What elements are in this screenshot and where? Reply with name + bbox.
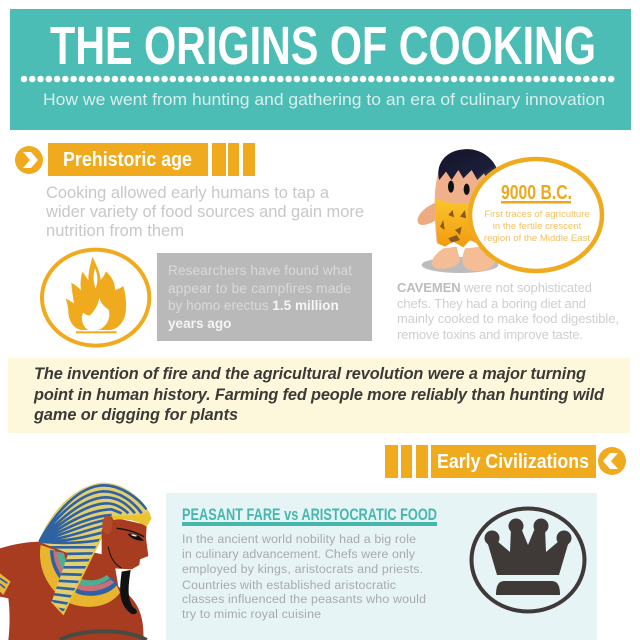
text: nobility: employed by kings, aristocrats and priests. <box>182 562 423 576</box>
text: nobility: in culinary advancement. Chefs were only <box>182 547 416 561</box>
body <box>0 542 143 640</box>
panel: header <box>10 9 631 130</box>
panel: turning point statement: point in human history. Farming fed people more reliably than hunting wild <box>33 386 605 404</box>
text: cavemen: CAVEMEN were not sophisticated <box>397 280 592 295</box>
subtitle: How we went from hunting and gathering to an era of culinary innovation <box>43 90 605 109</box>
text: nobility <box>182 532 426 621</box>
icon: fire <box>42 250 149 346</box>
panel: campfires callout: appear to be campfires made <box>168 281 351 296</box>
headdress <box>38 482 150 612</box>
text: nobility: try to mimic royal cuisine <box>182 607 321 621</box>
heading: Prehistoric age: Prehistoric age <box>63 149 192 171</box>
collar <box>40 545 120 607</box>
panel: campfires callout: by homo erectus 1.5 million <box>168 298 339 313</box>
illustration: pharaoh <box>0 480 153 640</box>
panel: campfires callout: years ago <box>168 316 231 331</box>
panel: campfires callout: Researchers have found what <box>168 263 352 278</box>
callout: 9000 B.C. <box>470 159 602 271</box>
text: cavemen <box>397 280 619 342</box>
text: cooking intro <box>45 184 364 240</box>
panel: turning point statement: game or digging for plants <box>33 406 238 424</box>
text: cooking intro: Cooking allowed early humans to tap a <box>46 184 330 202</box>
panel: turning point statement <box>8 358 630 433</box>
text: cavemen: mainly cooked to make food digestible, <box>397 311 619 326</box>
callout: 9000 B.C.: in the fertile crescent <box>493 221 582 232</box>
panel: turning point statement: The invention of fire and the agricultural revolution were a major turning <box>34 365 586 383</box>
icon: crown <box>472 508 584 612</box>
callout: 9000 B.C.: region of the Middle East <box>484 233 590 244</box>
heading: Prehistoric age <box>15 143 255 176</box>
text: cooking intro: wider variety of food sources and gain more <box>45 203 364 221</box>
text: nobility: In the ancient world nobility had a big role <box>182 532 416 546</box>
text: cavemen: remove toxins and improve taste. <box>397 327 583 342</box>
heading: peasant fare: PEASANT FARE vs ARISTOCRATIC FOOD <box>182 505 437 524</box>
text: cooking intro: nutrition from them <box>46 222 184 240</box>
face <box>102 517 148 569</box>
beard <box>120 570 137 614</box>
text: nobility: classes influenced the peasants who would <box>182 592 426 606</box>
panel: campfires callout <box>157 253 372 341</box>
text: nobility: Countries with established aristocratic <box>182 578 396 592</box>
text: cavemen: chefs. They had a boring diet and <box>397 296 586 311</box>
heading: Early Civilizations <box>385 445 626 478</box>
callout: 9000 B.C.: 9000 B.C. <box>501 182 572 204</box>
heading: Early Civilizations: Early Civilizations <box>437 451 589 473</box>
icon: caveman <box>418 149 499 273</box>
panel: peasant fare vs aristocratic food <box>166 493 597 640</box>
callout: 9000 B.C.: First traces of agriculture <box>484 209 590 220</box>
